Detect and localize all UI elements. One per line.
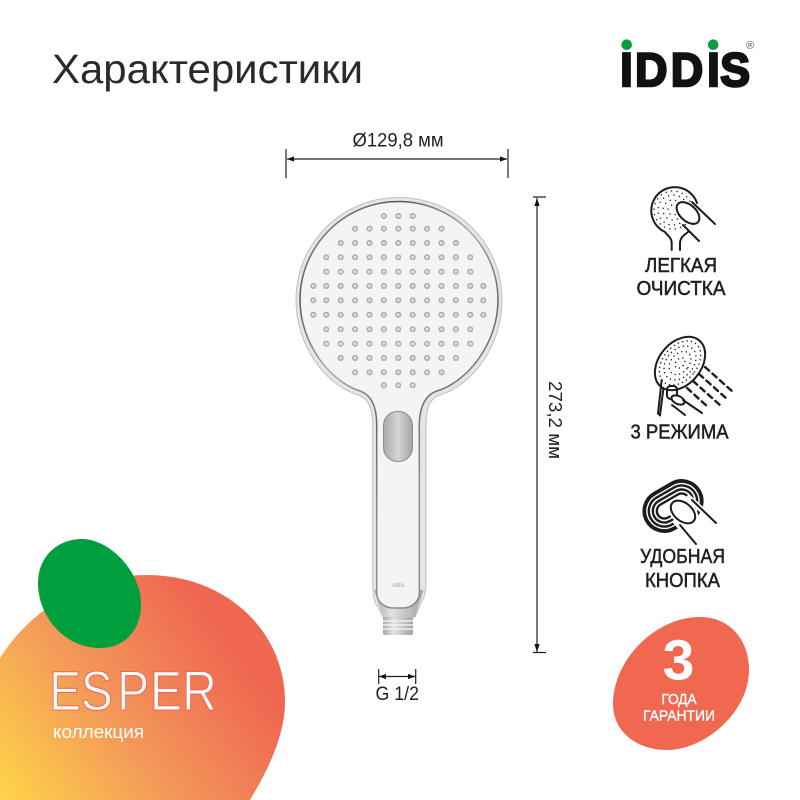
collection blob	[0, 539, 285, 800]
warranty badge: 3	[663, 628, 694, 692]
label: КНОПКА	[645, 570, 721, 592]
shower head product image	[296, 198, 502, 635]
dimension: total length: 273,2 мм	[545, 381, 566, 459]
orange gradient blob	[0, 575, 285, 800]
collection name: ESPER	[49, 660, 217, 723]
feature: three modes	[630, 327, 733, 444]
label: ЛЕГКАЯ	[645, 255, 717, 277]
collection caption: коллекция	[53, 722, 144, 742]
logo: IDDIS: ®	[746, 40, 754, 52]
faceplate	[300, 202, 498, 608]
dimension: head diameter	[286, 130, 508, 178]
mode button	[384, 412, 412, 462]
feature: easy cleaning	[636, 187, 726, 300]
label: УДОБНАЯ	[640, 546, 725, 568]
label: ОЧИСТКА	[636, 278, 726, 300]
icon: shower head with spray	[645, 327, 733, 415]
handle brand mark: iddis	[392, 583, 405, 589]
spray nozzles	[313, 216, 483, 385]
icon: cleaning nozzles with finger	[651, 187, 715, 250]
dimension: total length	[533, 197, 566, 652]
feature: comfortable button	[637, 474, 725, 592]
label: 3 РЕЖИМА	[630, 422, 729, 444]
icon: finger on ridged button	[637, 474, 716, 544]
title: Характеристики	[52, 46, 363, 92]
logo: IDDIS: IDDIS	[620, 44, 750, 96]
warranty badge: ГАРАНТИИ	[643, 708, 715, 724]
warranty badge	[613, 617, 749, 750]
dimension: thread size: G 1/2	[376, 684, 419, 705]
handle body	[296, 198, 502, 617]
dimension: thread size	[376, 669, 419, 705]
connector nut	[383, 616, 413, 635]
collar	[374, 590, 424, 617]
green blob	[38, 539, 141, 648]
dimension: head diameter: Ø129,8 мм	[352, 130, 444, 152]
warranty badge: ГОДА	[662, 691, 696, 708]
